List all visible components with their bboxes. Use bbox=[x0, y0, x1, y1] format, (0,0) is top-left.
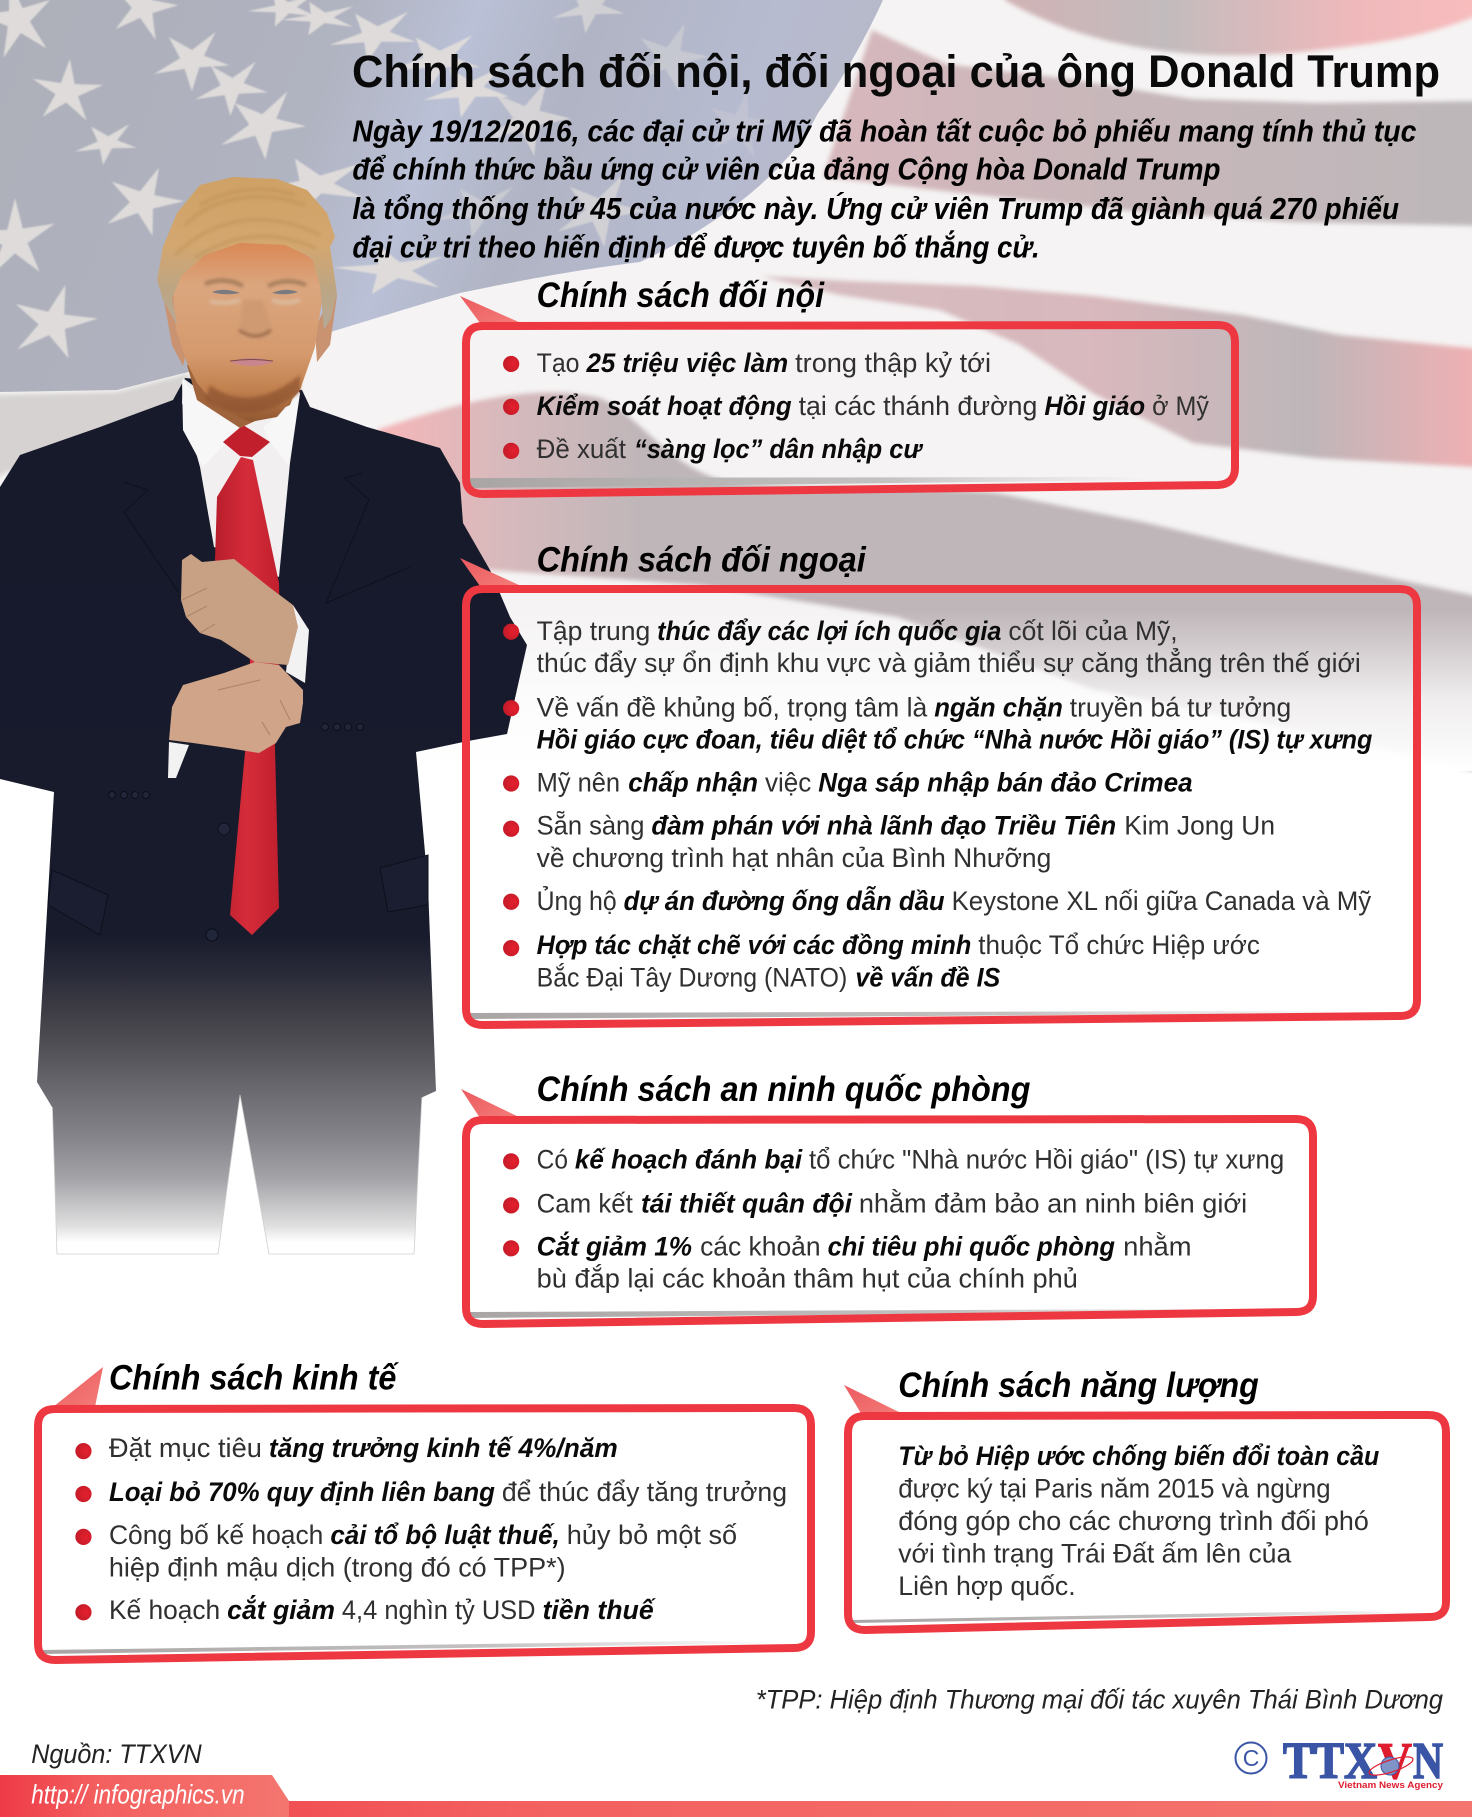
wordmark bbox=[1283, 1733, 1443, 1790]
text block: đóng góp cho các chương trình đối phó bbox=[898, 1506, 1369, 1536]
panel: foreign policy bbox=[460, 541, 1417, 1025]
list text: “sàng lọc” dân nhập cư bbox=[634, 434, 923, 464]
ears bbox=[163, 290, 337, 366]
list text bbox=[537, 616, 1372, 992]
list text: thuộc Tổ chức Hiệp ước bbox=[978, 930, 1260, 960]
bullets bbox=[503, 356, 519, 459]
hair bbox=[157, 177, 337, 330]
list text: tiền thuế bbox=[542, 1595, 656, 1625]
hand lower bbox=[169, 662, 303, 753]
list text: đàm phán với nhà lãnh đạo Triều Tiên bbox=[651, 811, 1116, 841]
list text: các khoản bbox=[700, 1231, 821, 1261]
face shading bbox=[205, 280, 306, 413]
panel: economic policy bbox=[38, 1360, 811, 1660]
background: American flag bbox=[0, 0, 1472, 775]
list text: cắt giảm bbox=[227, 1595, 335, 1625]
list text: Kim Jong Un bbox=[1124, 811, 1275, 841]
list text: Cam kết bbox=[537, 1188, 633, 1218]
suit buttons bbox=[108, 724, 364, 941]
list text: dự án đường ống dẫn dầu bbox=[624, 886, 945, 916]
intro paragraph: đại cử tri theo hiến định để được tuyên bố thắng cử. bbox=[352, 230, 1040, 264]
heading: Chính sách an ninh quốc phòng bbox=[537, 1071, 1030, 1109]
bullets bbox=[503, 1153, 519, 1256]
list text: 4,4 nghìn tỷ USD bbox=[342, 1595, 535, 1625]
icon: copyright: C bbox=[1243, 1745, 1259, 1771]
list text: Hồi giáo bbox=[1044, 391, 1145, 421]
intro paragraph: Ngày 19/12/2016, các đại cử tri Mỹ đã hoàn tất cuộc bỏ phiếu mang tính thủ tục bbox=[352, 115, 1417, 148]
text block: với tình trạng Trái Đất ấm lên của bbox=[898, 1538, 1291, 1568]
list text: tổ chức "Nhà nước Hồi giáo" (IS) tự xưng bbox=[809, 1144, 1284, 1174]
list text bbox=[109, 1433, 787, 1625]
list text: thúc đẩy các lợi ích quốc gia bbox=[657, 616, 1002, 646]
lapel seams bbox=[124, 473, 410, 603]
list text: Cắt giảm 1% bbox=[537, 1231, 692, 1261]
trousers bbox=[52, 1095, 422, 1254]
list text: trong thập kỷ tới bbox=[795, 348, 991, 378]
panel: energy policy bbox=[844, 1367, 1446, 1630]
mouth bbox=[230, 358, 273, 366]
list text: bù đắp lại các khoản thâm hụt của chính phủ bbox=[537, 1264, 1078, 1294]
tie bbox=[215, 457, 280, 935]
pointer bbox=[461, 1089, 521, 1118]
list text: Loại bỏ 70% quy định liên bang bbox=[109, 1477, 495, 1507]
icon: copyright bbox=[1236, 1742, 1266, 1774]
intro paragraph bbox=[352, 115, 1417, 264]
shirt bbox=[182, 378, 300, 577]
wordmark: TTX bbox=[1283, 1733, 1377, 1790]
text block: Liên hợp quốc. bbox=[898, 1571, 1076, 1601]
list text: tăng trưởng kinh tế 4%/năm bbox=[269, 1433, 618, 1463]
bullets bbox=[75, 1443, 92, 1620]
intro paragraph: là tổng thống thứ 45 của nước này. Ứng cử viên Trump đã giành quá 270 phiếu bbox=[352, 192, 1399, 226]
list text: hiệp định mậu dịch (trong đó có TPP*) bbox=[109, 1552, 566, 1582]
panel: security and defence policy bbox=[461, 1071, 1313, 1324]
wordmark: V bbox=[1378, 1733, 1412, 1790]
list text: Mỹ nên bbox=[537, 768, 620, 798]
box frame bbox=[848, 1415, 1446, 1630]
heading: Chính sách năng lượng bbox=[898, 1367, 1259, 1405]
list text: về vấn đề IS bbox=[855, 962, 1000, 992]
list text: việc bbox=[765, 768, 811, 798]
heading: Chính sách đối ngoại bbox=[537, 541, 867, 579]
tie knot bbox=[223, 425, 270, 457]
list text: Tạo bbox=[537, 348, 580, 378]
list text: Kế hoạch bbox=[109, 1595, 220, 1625]
icon: globe bbox=[1367, 1753, 1415, 1779]
list text: nhằm đảm bảo an ninh biên giới bbox=[859, 1188, 1247, 1218]
list text: Kiểm soát hoạt động bbox=[537, 391, 792, 421]
list text: Đặt mục tiêu bbox=[109, 1433, 262, 1463]
list text: tái thiết quân đội bbox=[641, 1188, 852, 1218]
list text bbox=[537, 1144, 1284, 1294]
text block bbox=[898, 1441, 1379, 1601]
illustration: Donald Trump portrait bbox=[0, 177, 527, 1254]
list text: Nga sáp nhập bán đảo Crimea bbox=[818, 768, 1193, 798]
heading: Chính sách đối nội bbox=[537, 277, 825, 315]
list text: chi tiêu phi quốc phòng bbox=[828, 1231, 1115, 1261]
box frame bbox=[466, 325, 1235, 494]
list text: tại các thánh đường bbox=[799, 391, 1037, 421]
text block: được ký tại Paris năm 2015 và ngừng bbox=[898, 1474, 1331, 1504]
list text: Keystone XL nối giữa Canada và Mỹ bbox=[952, 886, 1372, 916]
list text: ngăn chặn bbox=[934, 692, 1063, 722]
panel: domestic policy bbox=[460, 277, 1235, 494]
text block: Từ bỏ Hiệp ước chống biến đổi toàn cầu bbox=[898, 1441, 1379, 1471]
footnote: *TPP: Hiệp định Thương mại đối tác xuyên Thái Bình Dương bbox=[756, 1684, 1443, 1714]
collar bbox=[182, 380, 300, 467]
box frame bbox=[466, 589, 1417, 1025]
list text: Sẵn sàng bbox=[537, 811, 644, 841]
website link: http:// infographics.vn bbox=[31, 1779, 245, 1809]
tagline: Vietnam News Agency bbox=[1338, 1780, 1444, 1791]
list text: Hồi giáo cực đoan, tiêu diệt tổ chức “Nhà nước Hồi giáo” (IS) tự xưng bbox=[537, 725, 1372, 755]
list text: Hợp tác chặt chẽ với các đồng minh bbox=[537, 930, 971, 960]
footer bar bbox=[0, 1775, 1472, 1817]
list text: Có bbox=[537, 1144, 568, 1174]
cuffs bbox=[286, 605, 309, 683]
box frame bbox=[466, 1119, 1313, 1324]
neck shadow bbox=[187, 340, 315, 428]
face bbox=[172, 240, 322, 422]
list text: Tập trung bbox=[537, 616, 650, 646]
pointer bbox=[844, 1385, 905, 1415]
list text: Công bố kế hoạch bbox=[109, 1520, 323, 1550]
list text: kế hoạch đánh bại bbox=[575, 1144, 803, 1174]
list text: cốt lõi của Mỹ, bbox=[1008, 616, 1178, 646]
list text: thúc đẩy sự ổn định khu vực và giảm thiểu sự căng thẳng trên thế giới bbox=[537, 647, 1361, 678]
hand upper bbox=[181, 554, 298, 665]
pointer bbox=[53, 1367, 103, 1407]
list text: Về vấn đề khủng bố, trọng tâm là bbox=[537, 692, 927, 722]
list text: Ủng hộ bbox=[537, 885, 617, 916]
list text: truyền bá tư tưởng bbox=[1070, 692, 1291, 722]
list text: hủy bỏ một số bbox=[567, 1520, 737, 1550]
list text bbox=[537, 348, 1210, 464]
pockets bbox=[48, 855, 428, 935]
pointer bbox=[460, 296, 521, 323]
list text: Bắc Đại Tây Dương (NATO) bbox=[537, 962, 847, 992]
list text: về chương trình hạt nhân của Bình Nhưỡng bbox=[537, 843, 1051, 873]
heading: Chính sách kinh tế bbox=[109, 1360, 400, 1398]
pointer bbox=[460, 558, 521, 586]
list text: chấp nhận bbox=[628, 768, 758, 798]
eyes bbox=[212, 290, 298, 294]
logo: TTXVN bbox=[1236, 1733, 1444, 1791]
source: Nguồn: TTXVN bbox=[31, 1739, 202, 1769]
list text: để thúc đẩy tăng trưởng bbox=[502, 1477, 787, 1507]
list text: nhằm bbox=[1123, 1231, 1192, 1261]
intro paragraph: để chính thức bầu ứng cử viên của đảng Cộng hòa Donald Trump bbox=[352, 154, 1220, 187]
wordmark: N bbox=[1413, 1733, 1443, 1790]
list text: cải tổ bộ luật thuế, bbox=[330, 1520, 560, 1550]
bullets bbox=[503, 624, 519, 956]
list text: 25 triệu việc làm bbox=[586, 348, 788, 378]
title: Chính sách đối nội, đối ngoại của ông Donald Trump bbox=[352, 46, 1440, 97]
list text: Đề xuất bbox=[537, 434, 626, 464]
list text: ở Mỹ bbox=[1152, 391, 1210, 421]
suit jacket bbox=[0, 378, 527, 1140]
box frame bbox=[38, 1408, 811, 1660]
